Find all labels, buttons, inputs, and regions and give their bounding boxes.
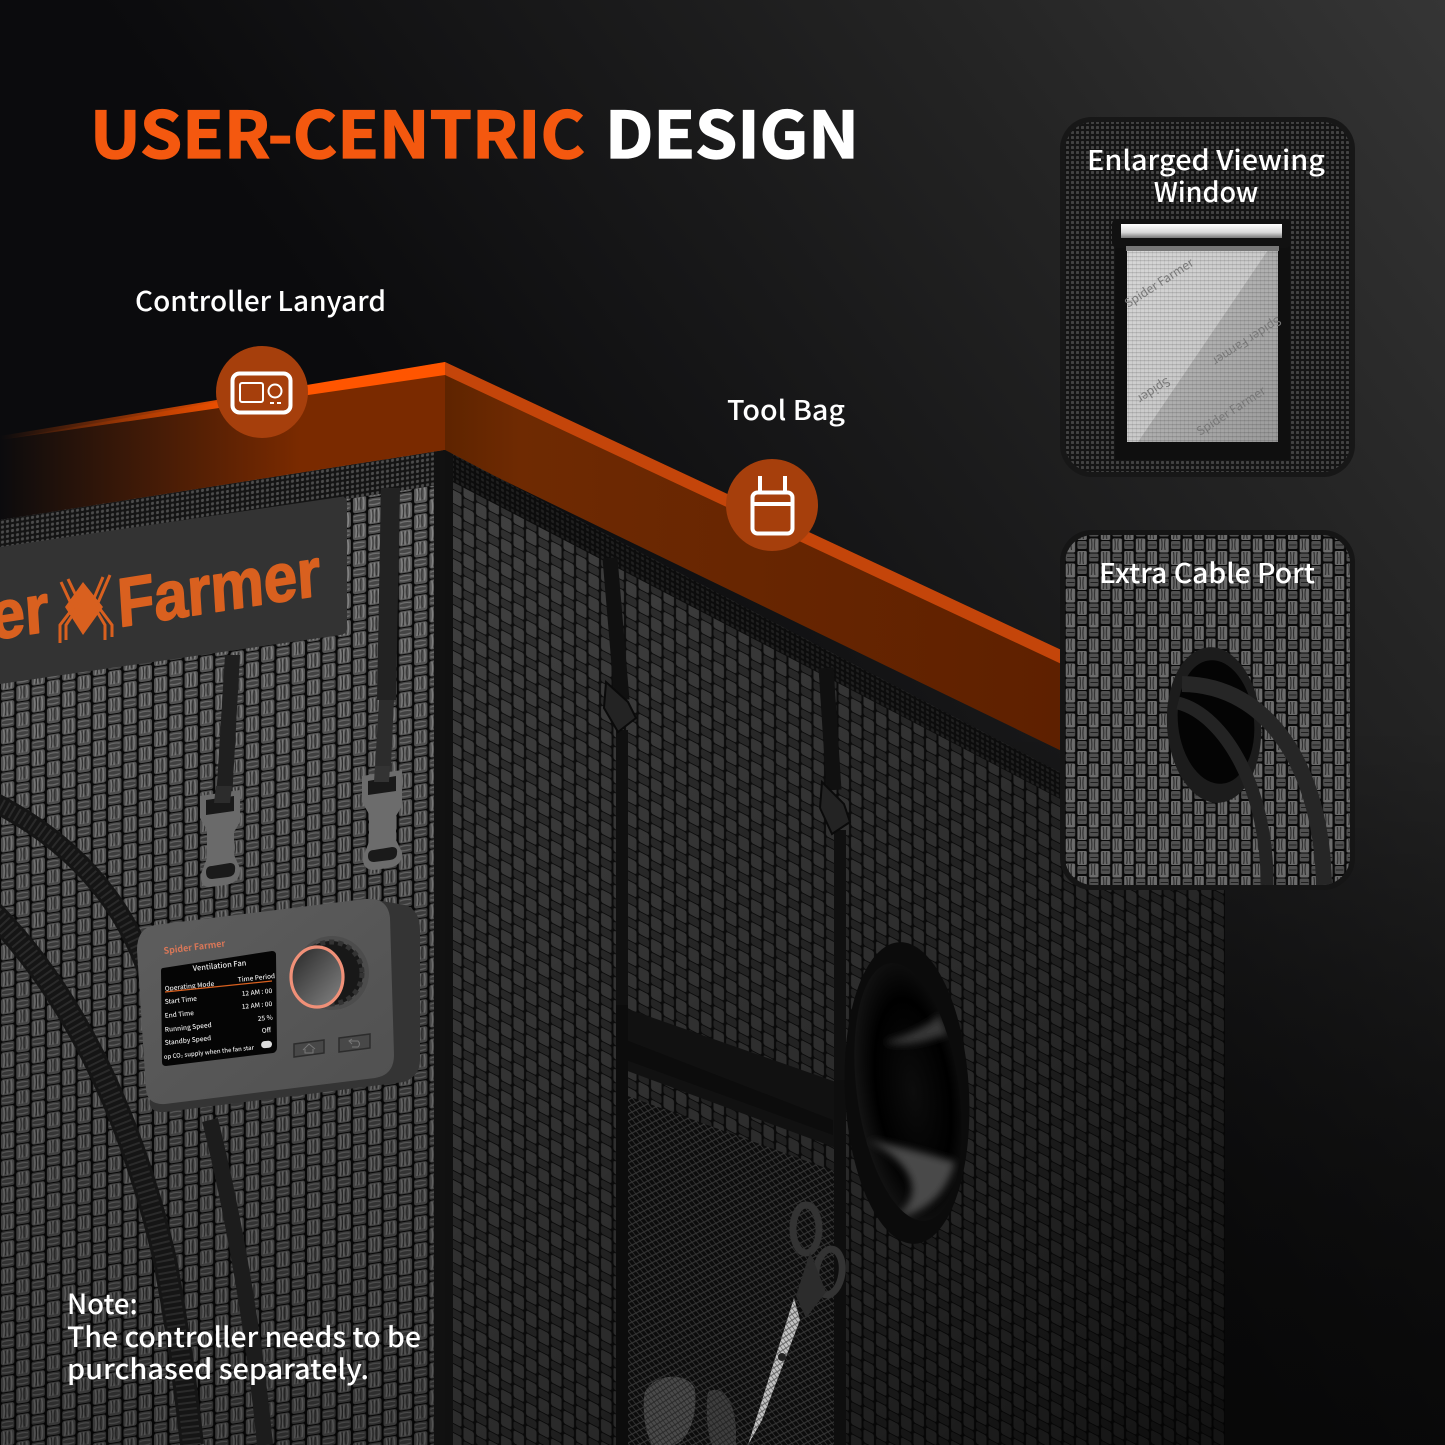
cables [1178,684,1324,885]
note: Note: [67,1282,138,1322]
screen text: Time Period [237,970,275,984]
icon: tool bag [726,459,818,551]
screen text: Standby Speed [164,1032,212,1047]
label: controller lanyard: Controller Lanyard [135,280,386,319]
window pane: Spider Farmer [1193,382,1269,439]
label: tool bag: Tool Bag [727,389,845,428]
tool bag straps [602,558,846,1080]
vertical velcro strip [377,488,400,700]
screen text: 12 AM : 00 [241,998,273,1011]
top binding right [453,454,1060,799]
controller brand: Spider Farmer [163,937,226,957]
screen text [163,957,275,1061]
controller buttons [294,1034,370,1057]
window pane: Spider Farmer [1209,313,1285,370]
screen text: Off [261,1024,272,1035]
door zipper bands [0,800,265,1445]
screen text: 25 % [257,1011,273,1023]
panel title: Window [1154,171,1258,210]
screen text: Operating Mode [164,978,215,993]
control knob [291,936,369,1010]
screen text: 12 AM : 00 [241,985,273,998]
note: purchased separately. [67,1347,369,1387]
scissors [748,1205,845,1445]
screen text: Ventilation Fan [191,957,247,974]
corner binding right [445,450,453,1445]
window roller [1112,219,1291,251]
vent port [846,942,970,1244]
tent left face [0,440,448,1445]
controller body side [150,899,420,1112]
panel title: Extra Cable Port [1099,552,1315,591]
right buckle [362,766,402,870]
panel: extra cable port [1060,530,1355,890]
orange tent top band [0,362,1070,755]
window zipper frame [1115,235,1290,460]
note: The controller needs to be [67,1315,421,1355]
tent right face [445,440,1235,1445]
screen text: Running Speed [164,1019,212,1034]
window pane: Spider [1134,374,1174,408]
cable port grommet [1166,647,1262,803]
brand logo plate [0,497,347,684]
strap clips [604,682,850,834]
panel title: Enlarged Viewing [1087,139,1325,178]
brand wordmark [0,533,322,655]
corner binding left [434,450,445,1445]
screen text: End Time [164,1007,195,1020]
lanyard straps and buckles [200,655,402,887]
title [90,85,859,177]
controller [137,899,420,1112]
brand wordmark: Farmer [115,533,322,642]
title: DESIGN [605,85,859,177]
screen text: op CO₂ supply when the fan star [163,1043,255,1061]
controller screen [161,951,277,1066]
screen text: Start Time [164,993,198,1006]
window pane: Spider Farmer [1121,254,1197,311]
window pane [1121,250,1285,442]
title: USER-CENTRIC [90,85,585,177]
panel: enlarged viewing window [1060,117,1355,477]
pocket [628,1010,834,1445]
left buckle [200,786,240,887]
top binding left [0,450,445,552]
controller face [137,899,394,1104]
icon: controller [216,346,308,438]
sunglasses [644,1377,736,1445]
icon: spider logo [60,575,112,643]
